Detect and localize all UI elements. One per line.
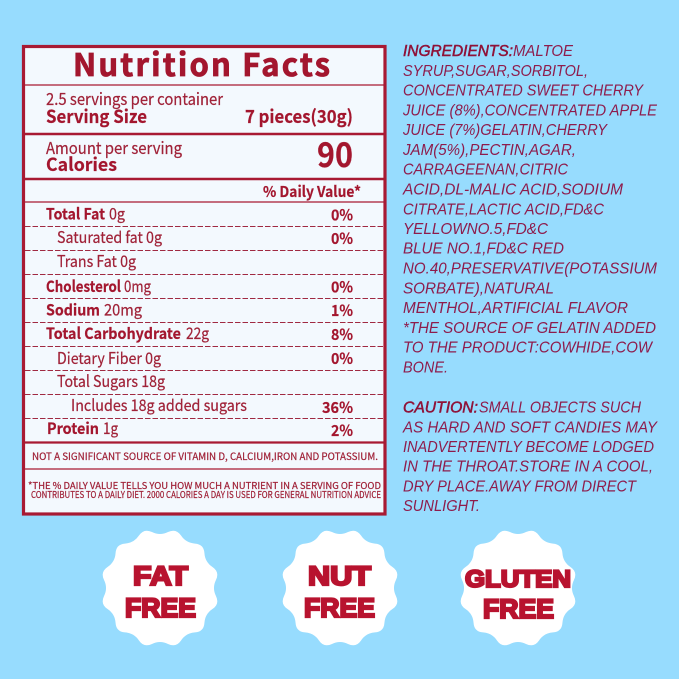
row: total fat: 0% xyxy=(331,204,353,226)
serving information: 7 pieces(30g) xyxy=(245,103,353,129)
row: trans fat: Trans Fat 0g xyxy=(57,248,136,272)
row: saturated fat: 0% xyxy=(331,227,353,249)
ingredients text block: ACID,DL-MALIC ACID,SODIUM xyxy=(402,182,623,199)
calories: Amount per serving xyxy=(46,135,183,159)
badge: gluten free: GLUTEN xyxy=(465,566,571,593)
row: saturated fat: Saturated fat 0g xyxy=(57,224,162,248)
ingredients text block: CARRAGEENAN,CITRIC xyxy=(403,162,569,179)
badge: fat free xyxy=(103,531,217,645)
ingredients text block: SYRUP,SUGAR,SORBITOL, xyxy=(403,63,588,80)
footnote: CONTRIBUTES TO A DAILY DIET. 2000 CALORIES A DAY IS USED FOR GENERAL NUTRITION ADVICE xyxy=(31,487,381,501)
row: dietary fiber: Dietary Fiber 0g xyxy=(57,345,161,369)
badge: gluten free: FREE xyxy=(483,594,554,624)
badge: gluten free xyxy=(461,531,575,645)
vitamin note: NOT A SIGNIFICANT SOURCE OF VITAMIN D, CALCIUM,IRON AND POTASSIUM. xyxy=(32,448,378,463)
serving information: 2.5 servings per container xyxy=(46,86,224,110)
ingredients text block: TO THE PRODUCT:COWHIDE,COW xyxy=(403,340,653,357)
row: cholesterol: 0% xyxy=(331,276,353,298)
row: dietary fiber xyxy=(57,345,353,369)
serving information: Serving Size xyxy=(46,103,147,129)
ingredients text block: BLUE NO.1,FD&C RED xyxy=(403,241,564,258)
calories: Calories xyxy=(46,151,117,177)
caution text block: AS HARD AND SOFT CANDIES MAY xyxy=(402,419,659,436)
ingredients text block xyxy=(402,43,658,376)
ingredients text block: CITRATE,LACTIC ACID,FD&C xyxy=(403,201,605,218)
ingredients text block: SORBATE),NATURAL xyxy=(403,280,554,297)
ingredients text block: BONE. xyxy=(403,360,448,376)
row: total sugars: Total Sugars 18g xyxy=(57,368,165,392)
row: sodium: Sodium xyxy=(46,298,100,320)
row: total fat xyxy=(46,200,353,226)
ingredients text block: JUICE (7%)GELATIN,CHERRY xyxy=(402,122,609,139)
badge: fat free: FAT xyxy=(133,561,188,591)
row: total carbohydrate: Total Carbohydrate xyxy=(46,322,181,344)
row: total fat: 0g xyxy=(109,200,125,224)
caution text block: SUNLIGHT. xyxy=(403,498,480,515)
caution text block: SMALL OBJECTS SUCH xyxy=(479,400,642,417)
ingredients text block: INGREDIENTS: xyxy=(403,43,513,60)
row: total carbohydrate xyxy=(46,320,353,345)
panel: nutrition facts xyxy=(24,40,385,514)
serving information xyxy=(46,86,353,129)
ingredients text block: YELLOWNO.5,FD&C xyxy=(403,221,549,238)
row: sodium: 1% xyxy=(331,299,353,321)
ingredients text block: MALTOE xyxy=(513,43,574,60)
badge: fat free: FREE xyxy=(125,593,196,623)
caution text block: INADVERTENTLY BECOME LODGED xyxy=(403,439,654,456)
caution text block: IN THE THROAT.STORE IN A COOL, xyxy=(403,459,653,476)
footnote: *THE % DAILY VALUE TELLS YOU HOW MUCH A NUTRIENT IN A SERVING OF FOOD xyxy=(28,478,381,492)
ingredients text block: NO.40,PRESERVATIVE(POTASSIUM xyxy=(403,260,657,278)
ingredients text block: MENTHOL,ARTIFICIAL FLAVOR xyxy=(403,300,628,317)
calories xyxy=(46,128,353,177)
row: total carbohydrate: 22g xyxy=(186,320,209,344)
ingredients text block: *THE SOURCE OF GELATIN ADDED xyxy=(403,320,656,337)
title: Nutrition Facts xyxy=(73,40,330,85)
badge: nut free xyxy=(283,531,397,645)
row: total fat: Total Fat xyxy=(46,202,105,224)
row: sodium: 20mg xyxy=(104,296,142,320)
row: protein xyxy=(47,415,353,441)
row: dietary fiber: 0% xyxy=(331,347,353,369)
row: protein: 1g xyxy=(103,415,118,439)
ingredients text block: CONCENTRATED SWEET CHERRY xyxy=(403,83,645,100)
row: sodium xyxy=(46,296,353,321)
ingredients text block: JAM(5%),PECTIN,AGAR, xyxy=(402,142,576,159)
row: cholesterol xyxy=(46,273,353,298)
daily value header: % Daily Value* xyxy=(263,181,361,202)
row: added sugars: Includes 18g added sugars xyxy=(71,392,247,416)
caution text block xyxy=(402,400,659,515)
badge: nut free: FREE xyxy=(304,593,375,623)
row: cholesterol: Cholesterol xyxy=(46,275,121,297)
badge: nut free: NUT xyxy=(308,561,371,591)
caution text block: CAUTION: xyxy=(403,400,478,417)
row: added sugars: 36% xyxy=(322,396,353,418)
row: cholesterol: 0mg xyxy=(124,273,151,297)
footnote xyxy=(28,478,381,501)
row: added sugars xyxy=(71,392,353,418)
row: total carbohydrate: 8% xyxy=(331,323,353,345)
row: protein: 2% xyxy=(331,419,353,441)
row: saturated fat xyxy=(57,224,353,249)
row: protein: Protein xyxy=(47,417,99,439)
calories: 90 xyxy=(317,128,353,177)
ingredients text block: JUICE (8%),CONCENTRATED APPLE xyxy=(402,102,658,119)
caution text block: DRY PLACE.AWAY FROM DIRECT xyxy=(403,478,637,496)
